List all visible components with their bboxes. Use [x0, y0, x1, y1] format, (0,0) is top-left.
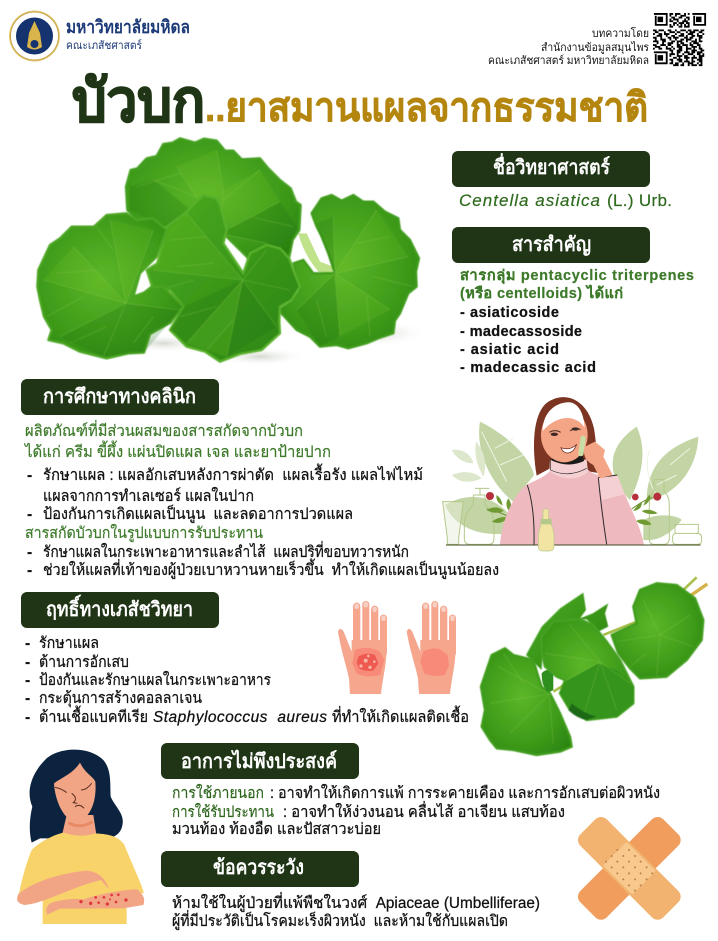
upper arm hand	[17, 871, 109, 905]
pharmacological effects list: -	[25, 654, 30, 671]
forearm with rash	[46, 889, 144, 915]
clinical studies text: -	[27, 562, 32, 579]
title: บัวบก	[72, 69, 205, 134]
clinical studies text: ได้แก่ ครีม ขี้ผึ้ง แผ่นปิดแผล เจล และยาป้ายปาก	[23, 440, 331, 461]
face	[54, 763, 96, 823]
section header: scientific name	[452, 151, 650, 187]
constituents text: - madecassoside	[460, 324, 582, 340]
pharmacological effects list: -	[25, 709, 30, 726]
illustration: woman with skincare products	[443, 397, 702, 551]
right hand	[407, 601, 456, 694]
clinical studies text: ผลิตภัณฑ์ที่มีส่วนผสมของสารสกัดจากบัวบก	[25, 420, 303, 440]
clinical studies text: -	[27, 467, 32, 484]
QR code	[653, 14, 705, 65]
clinical studies text	[23, 420, 499, 580]
precautions text: ผู้ที่มีประวัติเป็นโรคมะเร็งผิวหนัง และห้ามใช้กับแผลเปิด	[172, 910, 508, 931]
image: three centella leaves	[37, 138, 430, 366]
pharmacological effects list: ต้านเชื้อแบคทีเรีย	[39, 705, 148, 726]
leaf: center	[542, 619, 633, 720]
pharmacological effects list: -	[25, 690, 30, 707]
leaf: small fold	[542, 670, 553, 693]
adverse effects text: มวนท้อง ท้องอืด และปัสสาวะบ่อย	[172, 820, 381, 838]
pharmacological effects list: -	[25, 635, 30, 652]
section header: pharmacological effects: ฤทธิ์ทางเภสัชวิทยา	[46, 594, 193, 621]
article credit: คณะเภสัชศาสตร์ มหาวิทยาลัยมหิดล	[488, 54, 649, 67]
adverse effects text: : อาจทำให้ง่วงนอน คลื่นไส้ อาเจียน แสบท้อง	[283, 801, 565, 821]
clinical studies text: ป้องกันการเกิดแผลเป็นนูน และลดอาการปวดแผล	[43, 504, 353, 524]
section header: key constituents	[452, 227, 650, 263]
adverse effects text: : อาจทำให้เกิดการแพ้ การระคายเคือง และการอักเสบต่อผิวหนัง	[270, 784, 660, 802]
bandage pad	[603, 842, 656, 895]
leaf: back	[526, 593, 608, 670]
leaf: top	[126, 138, 301, 263]
adverse effects text: การใช้ภายนอก	[172, 784, 264, 802]
article credit: บทความโดย	[592, 26, 649, 40]
section header: adverse effects: อาการไม่พึงประสงค์	[181, 749, 337, 773]
clinical studies text: รักษาแผล : แผลอักเสบหลังการผ่าตัด แผลเรื้อรัง แผลไฟไหม้	[43, 463, 423, 484]
section header: precautions	[161, 851, 359, 887]
clinical studies text: -	[27, 506, 32, 523]
leaf: right	[278, 195, 419, 348]
section header: scientific name: ชื่อวิทยาศาสตร์	[493, 152, 610, 179]
illustration: crossed bandages	[575, 814, 684, 923]
leaf: right	[612, 583, 703, 678]
title	[72, 69, 648, 134]
shirt	[18, 833, 144, 924]
dropper bottle	[538, 509, 554, 551]
section header: precautions: ข้อควรระวัง	[213, 856, 304, 879]
clinical studies text: ช่วยให้แผลที่เท้าของผู้ป่วยเบาหวานหายเร็วขึ้น ทำให้เกิดแผลเป็นนูนน้อยลง	[43, 558, 499, 580]
pharmacological effects list: ต้านการอักเสบ	[39, 654, 129, 671]
sweater	[500, 468, 644, 545]
precautions text	[172, 892, 540, 931]
leaf: left	[37, 213, 183, 358]
leaf: lower left	[481, 648, 572, 755]
clinical studies text: แผลจากการทำเลเซอร์ แผลในปาก	[43, 487, 254, 505]
constituents text	[460, 268, 694, 376]
illustration: hands with wounds	[338, 601, 456, 694]
constituents text: (หรือ centelloids) ได้แก่	[460, 284, 623, 302]
neck	[62, 815, 97, 837]
section header: clinical studies: การศึกษาทางคลินิก	[43, 386, 196, 408]
adverse effects text: การใช้รับประทาน	[172, 803, 274, 821]
pharmacological effects list: รักษาแผล	[39, 635, 99, 652]
cosmetic bottles	[443, 479, 702, 544]
precautions text: ห้ามใช้ในผู้ป่วยที่แพ้พืชในวงศ์ Apiaceae (Umbelliferae)	[172, 892, 540, 913]
leaf: center	[147, 195, 300, 362]
hand with roller	[584, 442, 613, 478]
berries	[486, 492, 661, 525]
hair	[30, 750, 123, 843]
section header: clinical studies	[21, 379, 219, 415]
article credit	[488, 26, 649, 67]
constituents text: สารกลุ่ม pentacyclic triterpenes	[460, 268, 694, 284]
pharmacological effects list: กระตุ้นการสร้างคอลลาเจน	[39, 690, 202, 708]
title: ..ยาสมานแผลจากธรรมชาติ	[205, 86, 648, 130]
university name: มหาวิทยาลัยมหิดล	[66, 17, 190, 37]
scientific name text	[459, 191, 672, 210]
clinical studies text: สารสกัดบัวบกในรูปแบบการรับประทาน	[25, 524, 263, 543]
pharmacological effects list: Staphylococcus aureus	[153, 709, 327, 726]
logo: Mahidol University seal	[9, 10, 60, 62]
left hand	[338, 601, 387, 694]
constituents text: - asiatic acid	[460, 342, 559, 358]
university name: คณะเภสัชศาสตร์	[66, 38, 142, 52]
pharmacological effects list	[25, 635, 469, 726]
clinical studies text: รักษาแผลในกระเพาะอาหารและลำไส้ แผลปริที่ขอบทวารหนัก	[43, 541, 409, 561]
article credit: สำนักงานข้อมูลสมุนไพร	[541, 41, 649, 54]
clinical studies text: -	[27, 544, 32, 561]
table line	[446, 543, 701, 546]
pharmacological effects list: ที่ทำให้เกิดแผลติดเชื้อ	[332, 705, 469, 726]
image: centella sprig	[481, 577, 707, 755]
pharmacological effects list: -	[25, 672, 30, 689]
stems	[553, 577, 697, 692]
illustration: woman with skin rash	[17, 750, 144, 924]
university name	[66, 17, 190, 52]
constituents text: - madecassic acid	[460, 360, 596, 376]
adverse effects text	[172, 784, 660, 838]
section header: key constituents: สารสำคัญ	[512, 234, 591, 256]
section header: adverse effects	[161, 743, 359, 779]
pharmacological effects list: ป้องกันและรักษาแผลในกระเพาะอาหาร	[39, 671, 271, 689]
scientific name text: Centella asiatica	[459, 191, 600, 210]
section header: pharmacological effects	[21, 592, 219, 628]
scientific name text: (L.) Urb.	[607, 191, 672, 210]
hair	[534, 397, 610, 476]
constituents text: - asiaticoside	[460, 305, 559, 321]
neck and face	[552, 448, 584, 464]
